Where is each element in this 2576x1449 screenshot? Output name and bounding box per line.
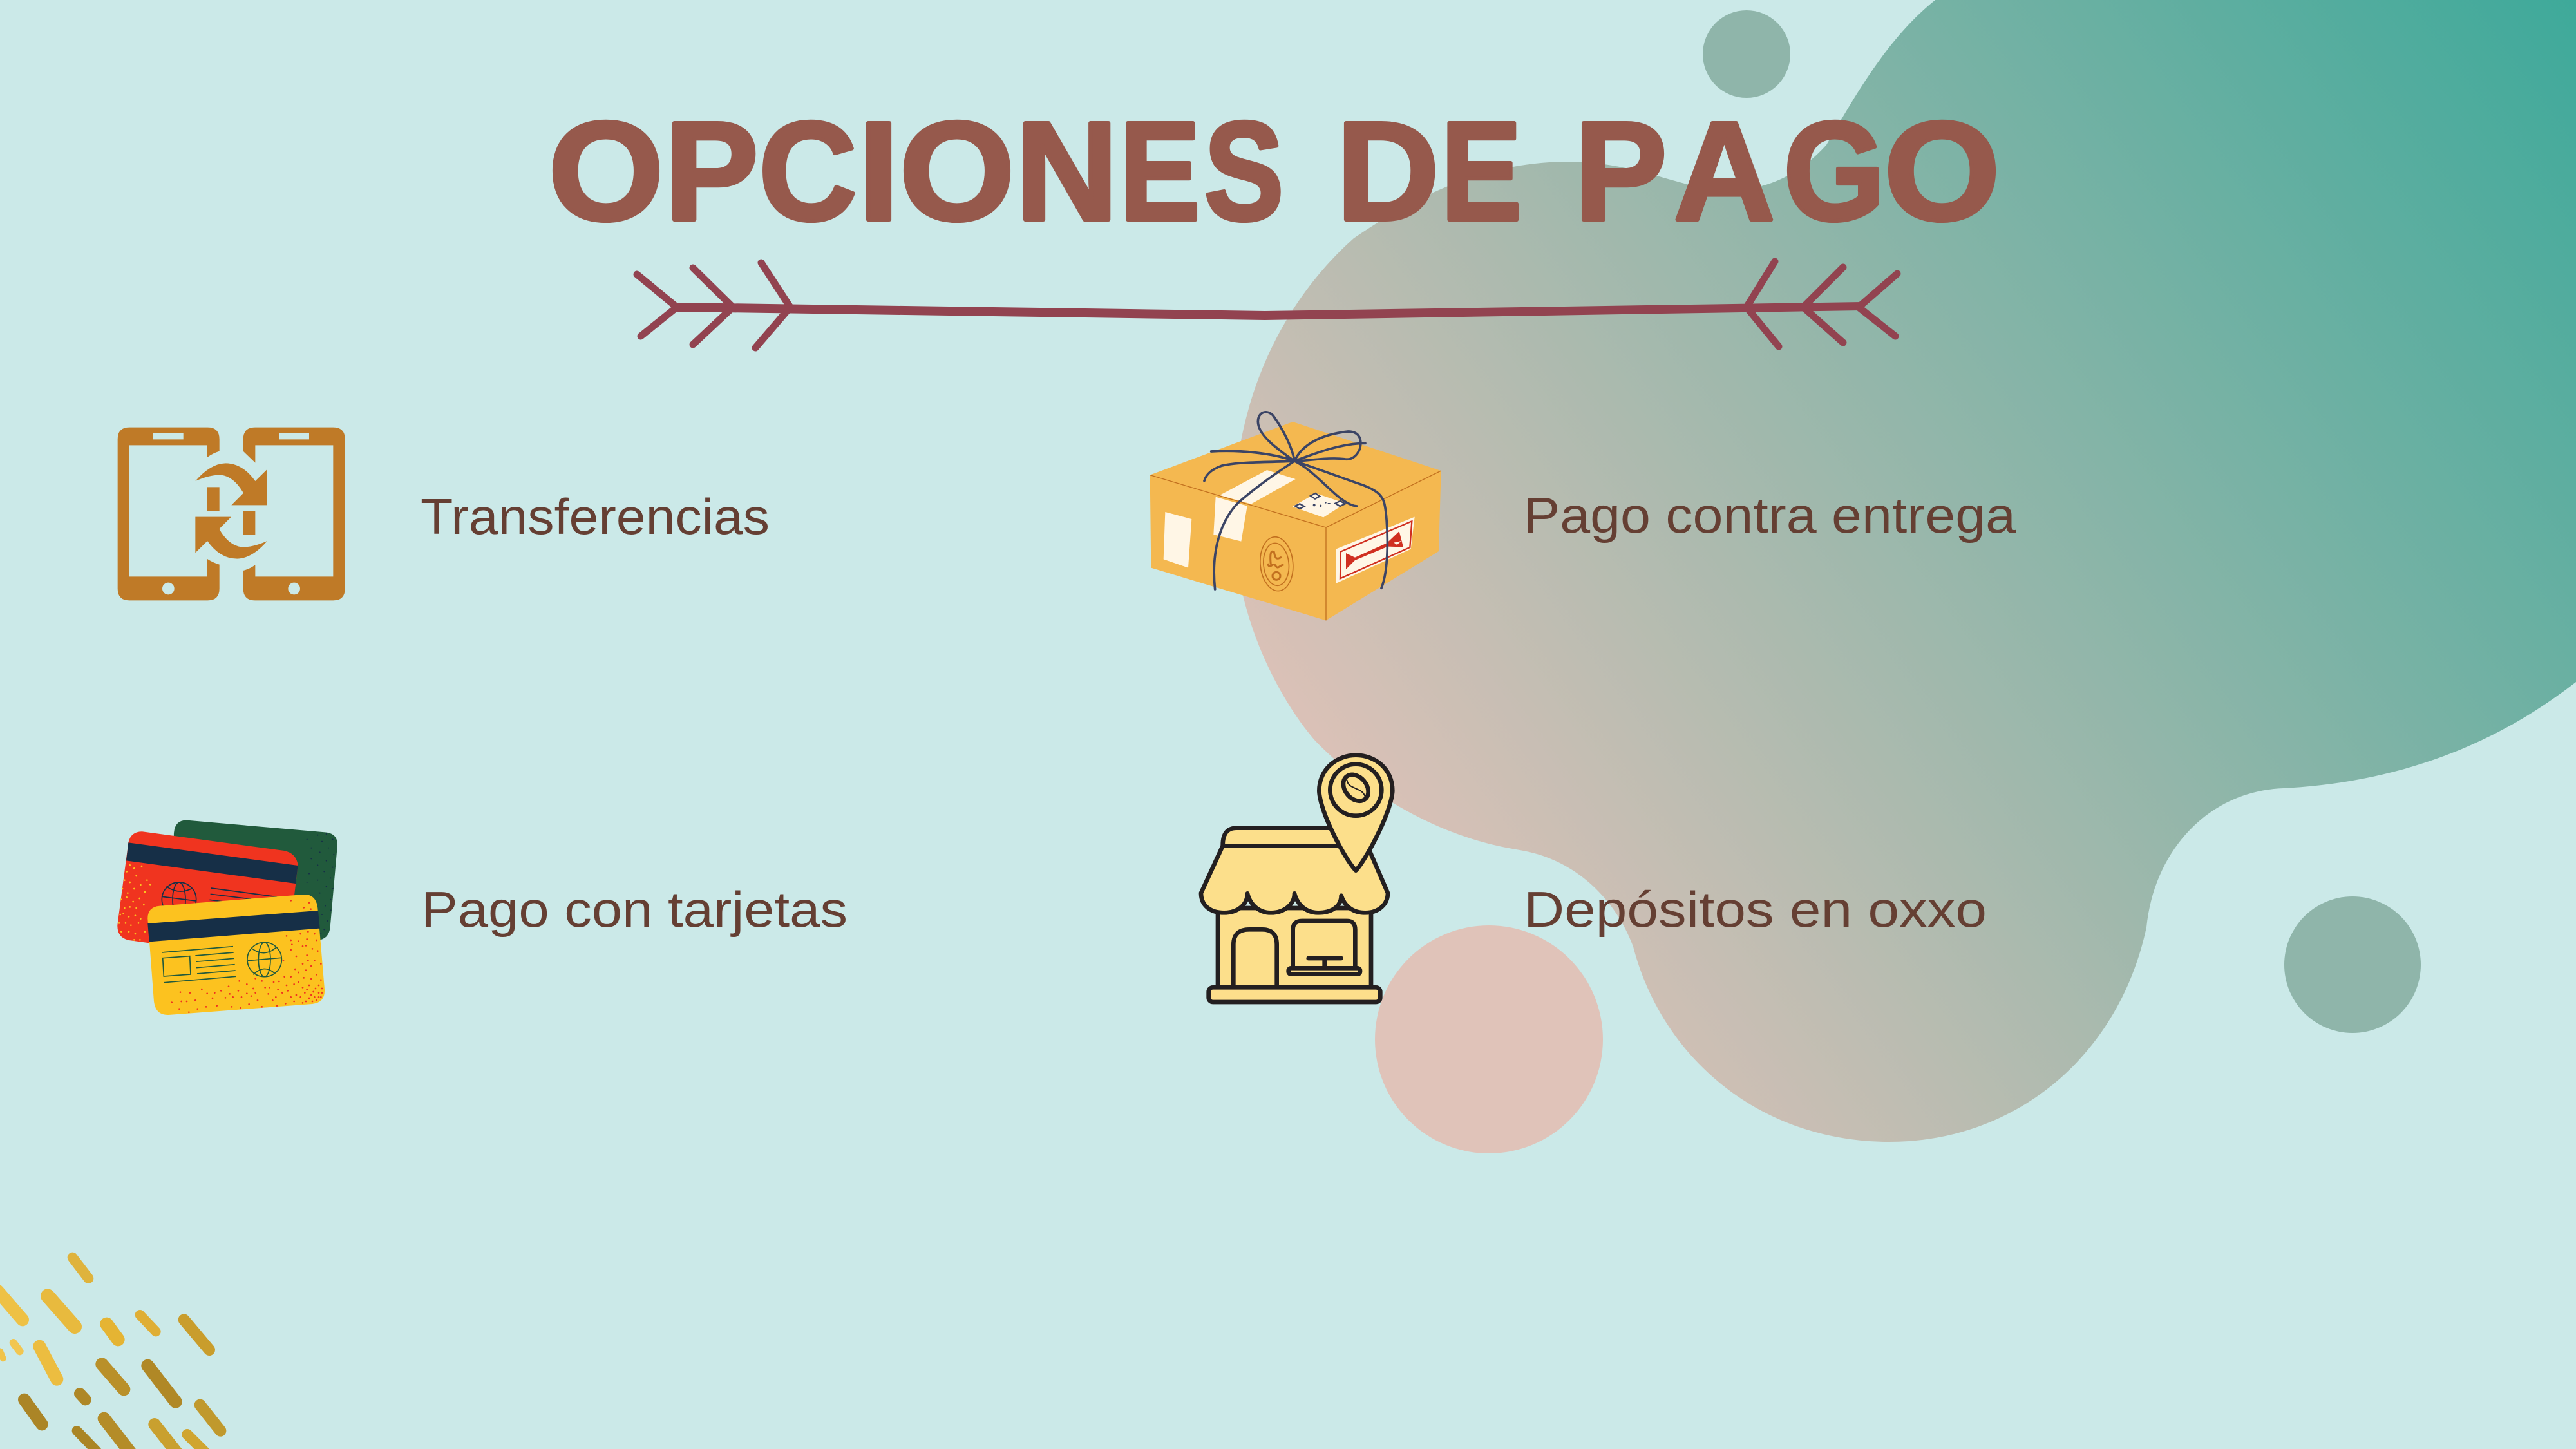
- title: D: [1336, 93, 1439, 250]
- title: P: [665, 93, 759, 250]
- gradient blob: [1233, 0, 2576, 1142]
- title: I: [858, 93, 899, 250]
- title: S: [1204, 93, 1283, 250]
- label: Pago contra entrega: Pago contra entrega: [1524, 487, 2016, 544]
- arrow divider: [637, 261, 1897, 348]
- title: A: [1674, 93, 1775, 250]
- label: Transferencias: Transferencias: [421, 488, 770, 545]
- label: Pago con tarjetas: Pago con tarjetas: [421, 881, 848, 938]
- title: G: [1783, 93, 1885, 250]
- icon: phones exchange: [118, 428, 345, 600]
- title: O: [900, 93, 1015, 250]
- label: Depositos en oxxo: Depósitos en oxxo: [1524, 881, 1987, 938]
- icon: credit cards: [117, 820, 337, 1015]
- circle: pink: [1375, 925, 1603, 1153]
- title: E: [1119, 93, 1200, 250]
- title: E: [1441, 93, 1522, 250]
- title: O: [549, 93, 664, 250]
- icon: shop with location pin: [1201, 755, 1392, 1002]
- title: P: [1574, 93, 1667, 250]
- title: O: [1884, 93, 2000, 250]
- title: C: [759, 93, 857, 250]
- circle: top: [1703, 10, 1790, 98]
- decoration: gold brush dashes: [0, 1258, 220, 1449]
- circle: right: [2284, 896, 2421, 1033]
- icon: parcel box: [1150, 412, 1441, 620]
- title: N: [1016, 93, 1118, 250]
